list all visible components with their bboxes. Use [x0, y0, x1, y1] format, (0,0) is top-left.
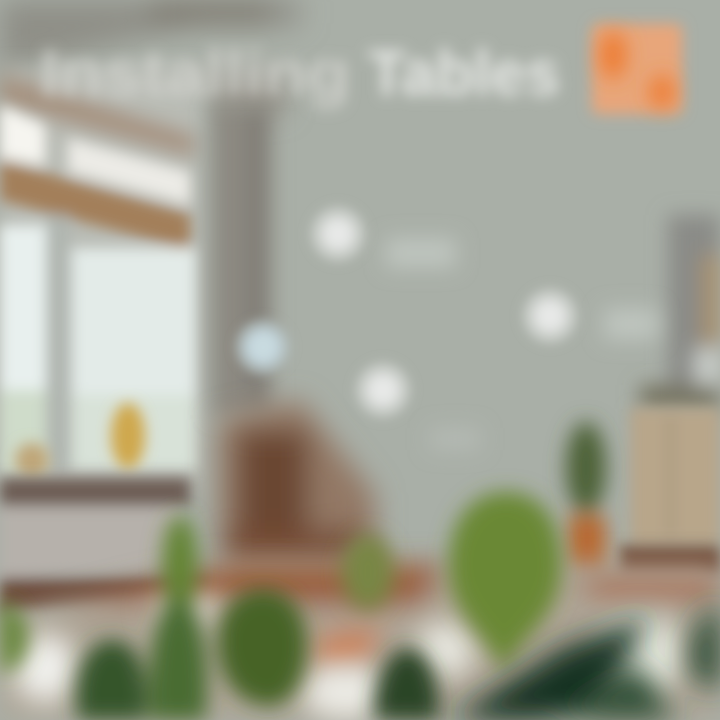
- ceiling beams: [0, 0, 300, 112]
- column: [212, 105, 272, 415]
- title: [40, 37, 560, 109]
- hotspot markers: [230, 200, 584, 424]
- marker labels: [386, 238, 658, 450]
- marker 3: [230, 314, 296, 380]
- marker 2: [516, 282, 584, 350]
- logo: orange square: [592, 24, 682, 114]
- title: Installing: [40, 37, 350, 109]
- window: [0, 70, 210, 614]
- foreground leaves: [0, 492, 720, 720]
- marker 4: [349, 356, 417, 424]
- wood furniture: [218, 400, 375, 560]
- title: Tables: [368, 37, 560, 109]
- floor rug: [0, 565, 720, 720]
- window-sill vases: [15, 403, 145, 477]
- potted plant: [566, 422, 606, 572]
- marker 1: [304, 200, 372, 268]
- sideboard and frame: [620, 215, 720, 573]
